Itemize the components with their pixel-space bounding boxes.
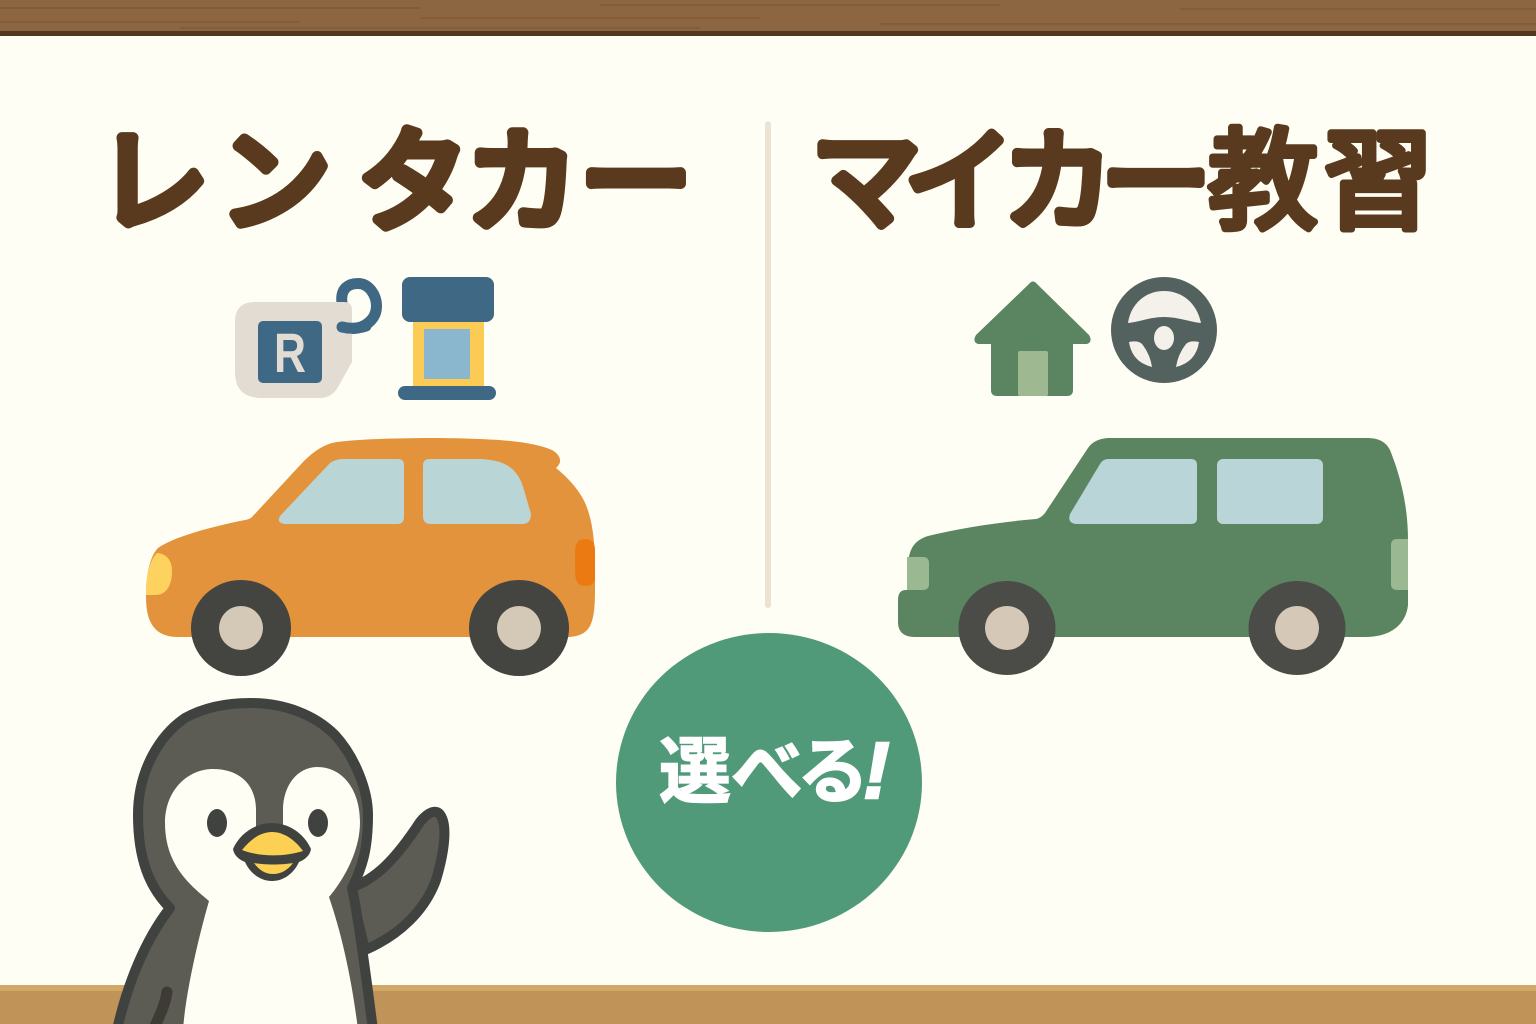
center divider	[765, 121, 771, 608]
penguin mascot	[117, 703, 444, 1024]
top wooden beam	[0, 0, 1536, 36]
front window	[1069, 459, 1197, 524]
head and body	[117, 703, 373, 1024]
badge: choose: !	[863, 726, 890, 815]
taillight	[575, 539, 595, 586]
green own car	[898, 438, 1408, 675]
front wheel	[958, 581, 1056, 675]
icon: rental key tag	[235, 284, 376, 398]
front window	[279, 459, 404, 524]
bottom wooden ledge	[0, 985, 1536, 1024]
beak	[233, 823, 311, 881]
headlight	[146, 553, 172, 595]
icon: rental booth	[398, 277, 496, 400]
front wheel	[191, 580, 291, 676]
flipper crease	[155, 992, 167, 1024]
right eye	[308, 809, 328, 837]
rear wheel	[1248, 581, 1346, 675]
rear window	[1217, 459, 1323, 524]
orange rental car	[146, 438, 595, 676]
rear wheel	[469, 580, 569, 676]
left eye	[207, 809, 227, 837]
icon: steering wheel	[1111, 277, 1217, 383]
rear light	[1391, 539, 1408, 590]
white face and belly	[165, 767, 360, 1024]
badge: choose: 選べる	[659, 733, 869, 813]
waving flipper	[350, 812, 444, 950]
badge: choose	[616, 633, 922, 932]
icon: house	[974, 282, 1091, 396]
front light	[907, 557, 929, 590]
icon: rental key tag: R	[274, 321, 306, 384]
rear window	[423, 459, 531, 524]
heading: rental car: レンタカー	[97, 120, 692, 245]
heading: own-car lessons: マイカー教習	[811, 121, 1433, 244]
